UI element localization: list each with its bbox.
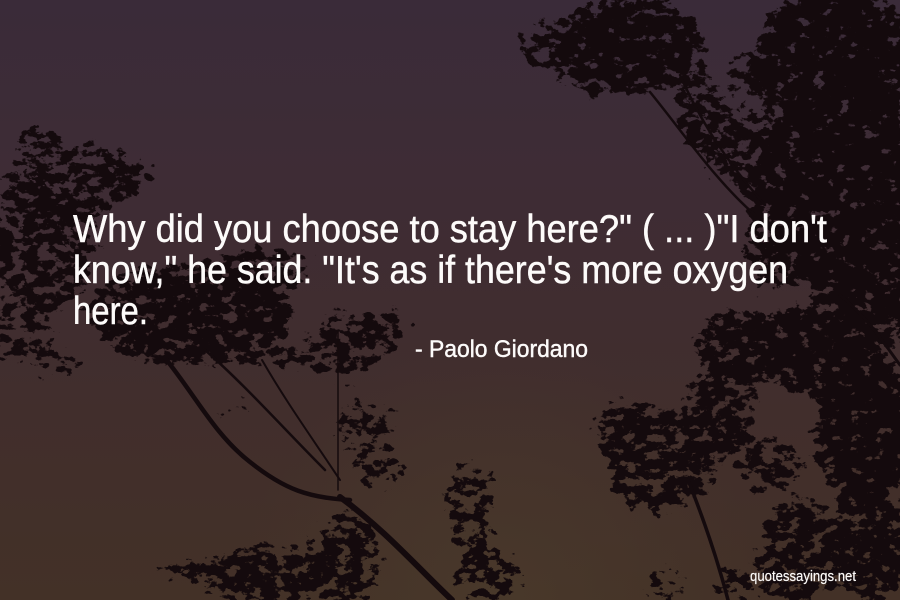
quote line 3: here. xyxy=(73,290,148,333)
foliage: lower centre xyxy=(590,360,808,600)
foliage: lower left xyxy=(155,448,528,600)
foliage: upper left xyxy=(0,121,160,381)
quote text xyxy=(73,208,827,333)
website watermark: quotessayings.net xyxy=(750,568,857,585)
author attribution: - Paolo Giordano xyxy=(415,336,588,363)
foliage: top centre xyxy=(512,0,725,155)
foliage: centre crown xyxy=(85,244,418,455)
tree silhouettes: branches xyxy=(165,75,900,600)
foliage: right tree xyxy=(695,0,900,600)
quote line 2: know," he said. "It's as if there's more oxygen xyxy=(73,249,788,292)
quote line 1: Why did you choose to stay here?" ( ... )"I don't xyxy=(73,208,827,251)
